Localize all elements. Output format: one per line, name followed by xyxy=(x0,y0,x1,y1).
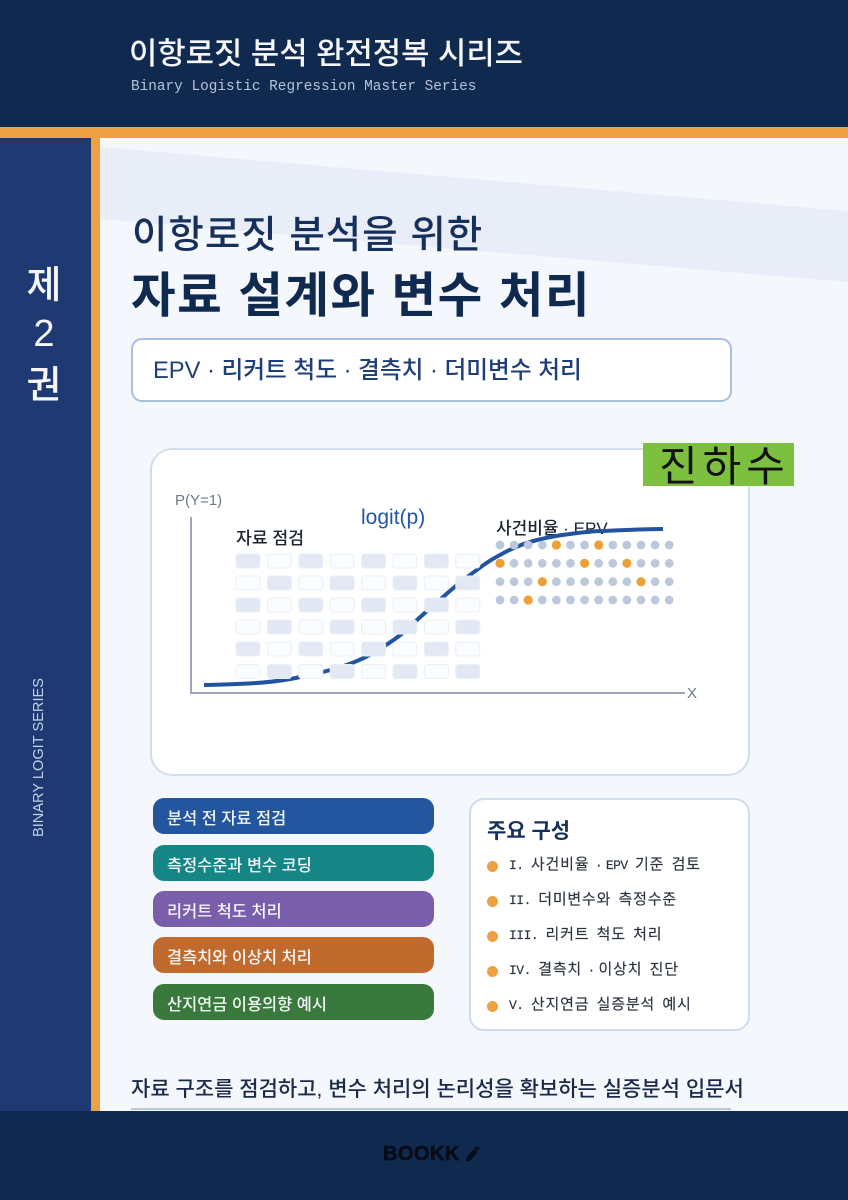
topic pill: coding: 측정수준과 변수 코딩 xyxy=(167,857,312,875)
curve label: logit(p) xyxy=(361,506,425,529)
data check label: 자료 점검 xyxy=(236,528,304,548)
chart card xyxy=(150,448,750,776)
book main title: 자료 설계와 변수 처리 xyxy=(131,269,591,323)
tagline rule xyxy=(131,1108,731,1110)
vertical series label: BINARY LOGIT SERIES xyxy=(31,679,47,838)
axes xyxy=(191,517,685,693)
orange horizontal stripe xyxy=(0,127,848,138)
topic pill: likert xyxy=(153,891,434,927)
series title: 이항로짓 분석 완전정복 시리즈 xyxy=(129,36,523,71)
contents item 2: II. 더미변수와 측정수준 xyxy=(509,888,677,909)
topic pill: example xyxy=(153,984,434,1020)
topic pill: likert: 리커트 척도 처리 xyxy=(167,903,282,921)
topic pill: example: 산지연금 이용의향 예시 xyxy=(167,996,327,1014)
contents item 3: III. 리커트 척도 처리 xyxy=(509,923,662,944)
volume label: 2 xyxy=(33,312,55,354)
event dots xyxy=(495,540,674,605)
tagline: 자료 구조를 점검하고, 변수 처리의 논리성을 확보하는 실증분석 입문서 xyxy=(131,1078,744,1101)
volume label xyxy=(27,254,61,409)
publisher name: BOOKK xyxy=(383,1143,460,1165)
background diagonal band xyxy=(100,147,848,282)
footer band xyxy=(0,1111,848,1200)
icon: pencil xyxy=(466,1146,480,1162)
contents heading: 주요 구성 xyxy=(487,820,570,843)
y axis label: P(Y=1) xyxy=(175,492,222,509)
book subtitle: 이항로짓 분석을 위한 xyxy=(132,214,483,257)
topic pill: data check: 분석 전 자료 점검 xyxy=(167,810,286,828)
contents item 1: I. 사건비율 · EPV 기준 검토 xyxy=(509,853,701,874)
contents item 5: V. 산지연금 실증분석 예시 xyxy=(509,993,692,1014)
left sidebar xyxy=(0,138,91,1111)
topic pill: data check xyxy=(153,798,434,834)
topic pill: missing values: 결측치와 이상치 처리 xyxy=(167,949,312,967)
topic pill: missing values xyxy=(153,937,434,973)
contents item 4: IV. 결측치 · 이상치 진단 xyxy=(509,958,679,979)
volume label: 제 xyxy=(27,254,61,309)
top header band xyxy=(0,0,848,127)
topic pill: coding xyxy=(153,845,434,881)
keyword text: EPV · 리커트 척도 · 결측치 · 더미변수 처리 xyxy=(153,358,582,384)
logistic chart illustration xyxy=(175,492,697,702)
contents panel xyxy=(469,798,750,1031)
keyword box xyxy=(131,338,732,402)
logistic curve xyxy=(204,529,663,685)
publisher logo xyxy=(383,1143,480,1165)
x axis label: X xyxy=(687,685,697,702)
series subtitle: Binary Logistic Regression Master Series xyxy=(131,79,476,95)
data grid xyxy=(236,554,480,678)
orange vertical stripe xyxy=(91,138,100,1111)
author name tag: 진하수 xyxy=(659,445,790,491)
volume label: 권 xyxy=(27,354,61,409)
event rate label: 사건비율 · EPV xyxy=(496,519,608,538)
